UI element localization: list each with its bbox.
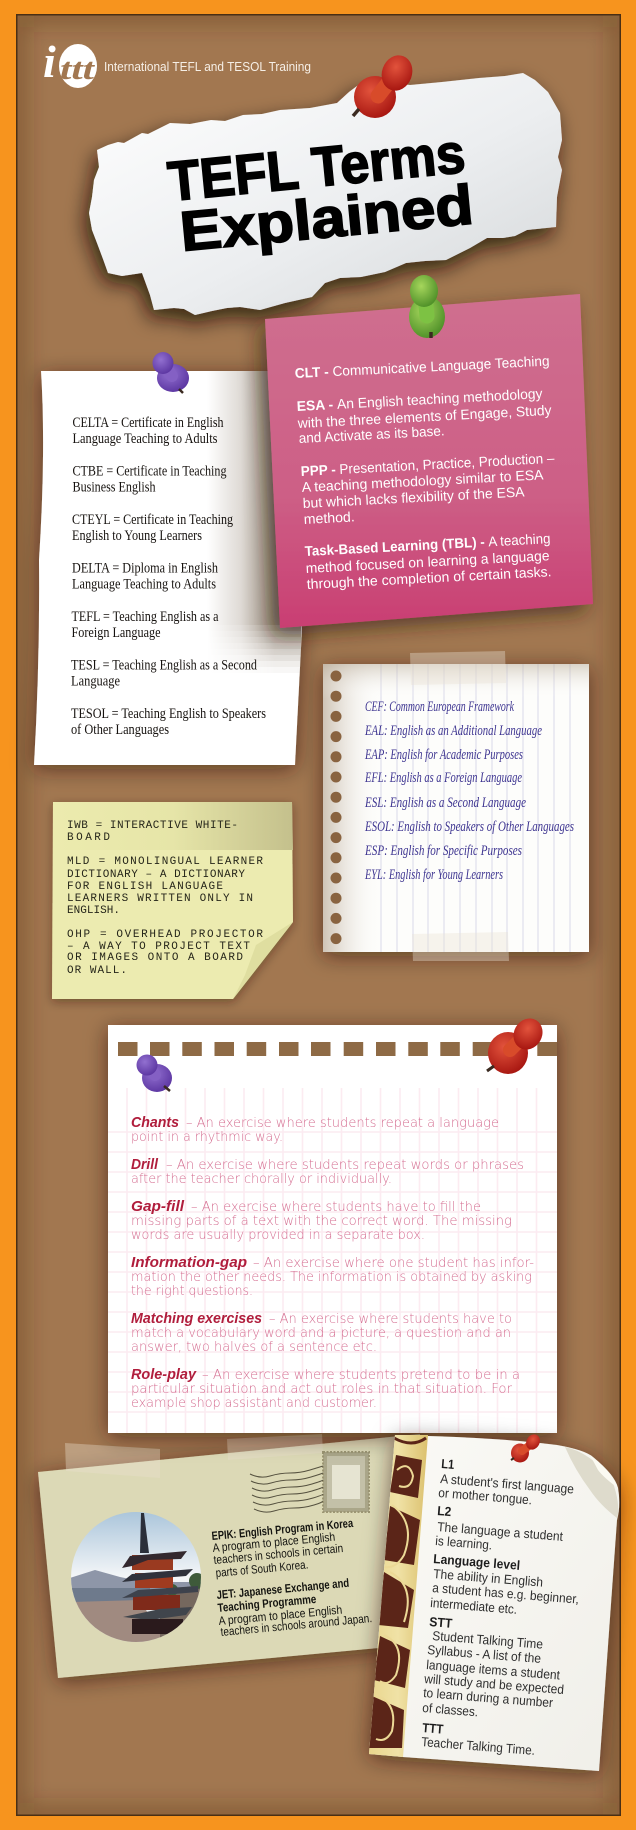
classroom activity definitions: mation the other needs. The information is obtained by asking (131, 1270, 532, 1285)
sticky note text: BOARD (67, 832, 110, 844)
note text: certificates: CTBE = Certificate in Teaching (72, 464, 226, 480)
pink note text: through the completion of certain tasks. (306, 563, 552, 592)
note glossary text: language items a student (426, 1657, 561, 1683)
note text: certificates: Business English (72, 480, 156, 496)
classroom activity definitions: Drill (131, 1156, 159, 1173)
sticky note text: IWB = INTERACTIVE WHITE- (67, 820, 238, 832)
classroom activity definitions: particular situation and act out roles in that situation. For (131, 1382, 513, 1397)
icon: red push pin on grid paper (487, 1013, 548, 1074)
classroom activity definitions: the right questions. (131, 1284, 253, 1299)
handwritten glossary: ESL: English as a Second Language (364, 795, 526, 811)
note glossary text: to learn during a number (423, 1685, 554, 1710)
sticky note text: FOR ENGLISH LANGUAGE (67, 881, 223, 893)
pink note text: A teaching methodology similar to ESA (301, 466, 544, 495)
icon: small red push pin (511, 1432, 543, 1462)
classroom activity definitions: – An exercise where students repeat a language (186, 1116, 499, 1131)
binder holes (330, 670, 342, 944)
sticky note text: ENGLISH. (67, 905, 120, 917)
note text: certificates: DELTA = Diploma in English (72, 560, 219, 576)
pink note text: method focused on learning a language (305, 547, 550, 576)
classroom activity definitions: point in a rhythmic way. (131, 1130, 283, 1145)
note glossary text: of classes. (422, 1700, 479, 1719)
sticky note text: – A WAY TO PROJECT TEXT (67, 941, 250, 953)
note glossary text (421, 1456, 579, 1758)
note text: certificates: TESL = Teaching English as a Second (71, 658, 258, 674)
logo (43, 36, 311, 88)
classroom activity definitions: example shop assistant and customer. (131, 1396, 377, 1411)
note glossary text: Language level (433, 1551, 521, 1573)
note glossary text: STT (429, 1614, 453, 1631)
icon: green push pin (409, 275, 445, 338)
note glossary text: L2 (437, 1503, 452, 1519)
classroom activity definitions: – An exercise where students pretend to be in a (202, 1368, 520, 1383)
sticky note text (67, 820, 263, 977)
icon: purple push pin on grid paper (136, 1054, 172, 1092)
handwritten glossary: CEF: Common European Framework (365, 699, 514, 715)
note glossary text: Syllabus - A list of the (427, 1642, 542, 1666)
postcard text: A program to place English (212, 1530, 336, 1555)
pink note text: with the three elements of Engage, Study (296, 402, 552, 431)
icon: red push pin on title (353, 51, 417, 118)
note text: certificates: Language Teaching to Adults (72, 431, 218, 447)
handwritten glossary (364, 699, 574, 883)
title: Explained (177, 173, 476, 263)
panel: ornamental note (365, 1430, 619, 1771)
perforation holes (118, 1042, 557, 1056)
note text: certificates: TESOL = Teaching English to Speakers (71, 706, 266, 722)
note text: certificates: English to Young Learners (72, 528, 202, 544)
photo: Japanese pagoda (71, 1512, 201, 1642)
sticky note text: MLD = MONOLINGUAL LEARNER (67, 856, 263, 868)
classroom activity definitions: – An exercise where students have to (269, 1312, 512, 1327)
postcard text (211, 1516, 373, 1639)
postcard text: teachers in schools around Japan. (220, 1611, 373, 1639)
postcard text: A program to place English (218, 1603, 343, 1628)
panel: lined notebook page (323, 651, 589, 961)
note glossary text: a student has e.g. beginner, (432, 1580, 579, 1607)
classroom activity definitions: words are usually provided in a separate box. (131, 1228, 425, 1243)
icon: purple push pin (152, 352, 189, 393)
pink grid (108, 1088, 557, 1433)
title: TEFL Terms (165, 121, 468, 213)
classroom activity definitions (131, 1114, 534, 1411)
handwritten glossary: EFL: English as a Foreign Language (364, 770, 522, 786)
page curl (565, 1447, 618, 1518)
note text: certificates: of Other Languages (71, 722, 169, 738)
panel: title torn paper (89, 73, 562, 315)
classroom activity definitions: Information-gap (131, 1254, 247, 1271)
sticky note text: OHP = OVERHEAD PROJECTOR (67, 929, 263, 941)
pink note text: and Activate as its base. (298, 422, 445, 446)
classroom activity definitions: – An exercise where students have to fill the (191, 1200, 481, 1215)
pink note text (294, 353, 555, 592)
handwritten glossary: EYL: English for Young Learners (364, 867, 503, 883)
classroom activity definitions: answer, two halves of a sentence etc. (131, 1340, 377, 1355)
classroom activity definitions: match a vocabulary word and a picture, a question and an (131, 1326, 511, 1341)
logo: i (43, 36, 56, 87)
note text: certificates: Foreign Language (72, 625, 160, 641)
note text: certificates: Language (71, 674, 120, 690)
pink note text: but which lacks flexibility of the ESA (302, 483, 526, 511)
tape strips (410, 651, 509, 961)
note text: certificates: CTEYL = Certificate in Teaching (72, 512, 233, 528)
classroom activity definitions: Chants (131, 1114, 179, 1131)
note text: certificates: TEFL = Teaching English as a (72, 609, 219, 625)
sticky note text: OR WALL. (67, 965, 127, 977)
panel: postcard (38, 1434, 420, 1678)
classroom activity definitions: missing parts of a text with the correct word. The missing (131, 1214, 512, 1229)
classroom activity definitions: Matching exercises (131, 1310, 262, 1327)
panel: pink note (265, 294, 593, 628)
postage stamp (323, 1452, 369, 1512)
panel: grid paper (108, 1025, 557, 1433)
note text: certificates: CELTA = Certificate in English (72, 415, 224, 431)
sticky note text: OR IMAGES ONTO A BOARD (67, 952, 243, 964)
classroom activity definitions: – An exercise where one student has infor- (253, 1256, 534, 1271)
postcard text: JET: Japanese Exchange and (216, 1576, 350, 1602)
postcard text: Teaching Programme (217, 1592, 317, 1615)
classroom activity definitions: Gap-fill (131, 1198, 185, 1215)
note glossary text: The ability in English (433, 1566, 544, 1590)
postcard text: EPIK: English Program in Korea (211, 1516, 354, 1543)
classroom activity definitions: Role-play (131, 1366, 197, 1383)
logo wordmark: International TEFL and TESOL Training (104, 60, 311, 74)
logo: ttt (60, 51, 96, 86)
handwritten glossary: EAL: English as an Additional Language (364, 723, 542, 739)
pink note text: PPP - Presentation, Practice, Production – (300, 450, 555, 479)
tape strips (65, 1434, 323, 1478)
pink note text: CLT - Communicative Language Teaching (294, 353, 550, 381)
note glossary text: TTT (422, 1720, 444, 1737)
note glossary text: L1 (441, 1456, 455, 1472)
note glossary text: or mother tongue. (438, 1485, 533, 1507)
postcard text: parts of South Korea. (215, 1557, 309, 1580)
note text: certificates: Language Teaching to Adults (72, 576, 216, 592)
postmark wavy lines (250, 1466, 323, 1512)
note glossary text: is learning. (435, 1533, 493, 1552)
pink note text: method. (303, 508, 355, 527)
pink note text: ESA - An English teaching methodology (296, 385, 543, 414)
handwritten glossary: ESP: English for Specific Purposes (364, 843, 522, 859)
sticky note text: DICTIONARY – A DICTIONARY (67, 869, 245, 881)
handwritten glossary: EAP: English for Academic Purposes (364, 747, 523, 763)
panel: yellow sticky note (52, 802, 293, 999)
classroom activity definitions: after the teacher chorally or individually. (131, 1172, 392, 1187)
note glossary text: The language a student (437, 1519, 564, 1544)
note text: certificates (71, 415, 266, 738)
sticky note text: LEARNERS WRITTEN ONLY IN (67, 893, 253, 905)
note glossary text: will study and be expected (423, 1671, 565, 1697)
gold ornamental band (369, 1435, 428, 1757)
note glossary text: A student's first language (440, 1471, 575, 1497)
classroom activity definitions: – An exercise where students repeat words or phrases (166, 1158, 524, 1173)
pink note text: Task-Based Learning (TBL) - A teaching (304, 530, 551, 559)
note glossary text: intermediate etc. (430, 1595, 518, 1617)
panel: white certificates note (34, 371, 302, 765)
note glossary text: Student Talking Time (432, 1628, 544, 1652)
postcard text: teachers in schools in certain (213, 1541, 344, 1567)
title (165, 121, 476, 263)
note glossary text: Teacher Talking Time. (421, 1734, 536, 1758)
